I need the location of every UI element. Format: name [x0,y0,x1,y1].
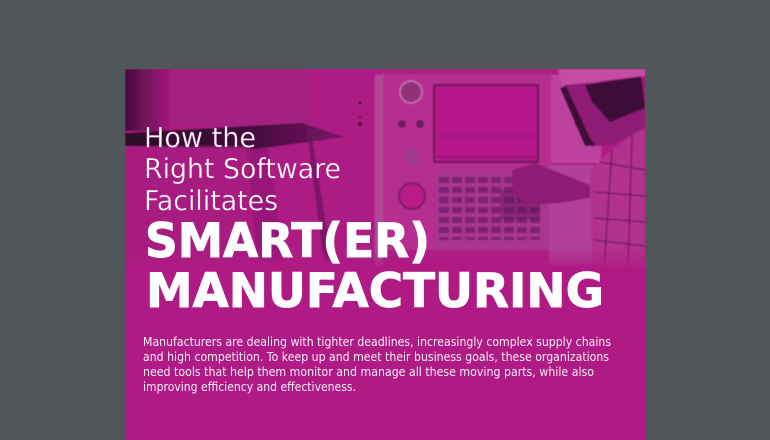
heading: light lines: Right Software [144,152,341,185]
title [144,121,604,319]
screen [434,85,538,162]
worker head and hard hat [565,78,645,146]
panel: cover [125,69,645,440]
heading: light lines: How the [144,121,256,154]
heading: bold lines: SMART(ER) [145,214,430,269]
machine console [383,72,551,250]
intro text: need tools that help them monitor and manage all these moving parts, while also [143,364,594,379]
intro text: and high competition. To keep up and meet their business goals, these organizations [143,349,609,364]
heading: bold lines [145,214,604,319]
heading: light lines [144,121,341,217]
photo: factory machine and worker [125,69,645,269]
heading: bold lines: MANUFACTURING [146,264,604,319]
worker shirt [590,125,645,268]
photo fade [258,252,645,268]
heading: light lines: Facilitates [144,184,278,217]
dial [400,81,422,103]
worker arm and hand [512,163,590,205]
intro text: improving efficiency and effectiveness. [143,379,356,394]
intro text [143,334,611,394]
keypad [436,170,548,250]
intro text: Manufacturers are dealing with tighter deadlines, increasingly complex supply chains [143,334,611,349]
wall behind worker [551,75,601,163]
